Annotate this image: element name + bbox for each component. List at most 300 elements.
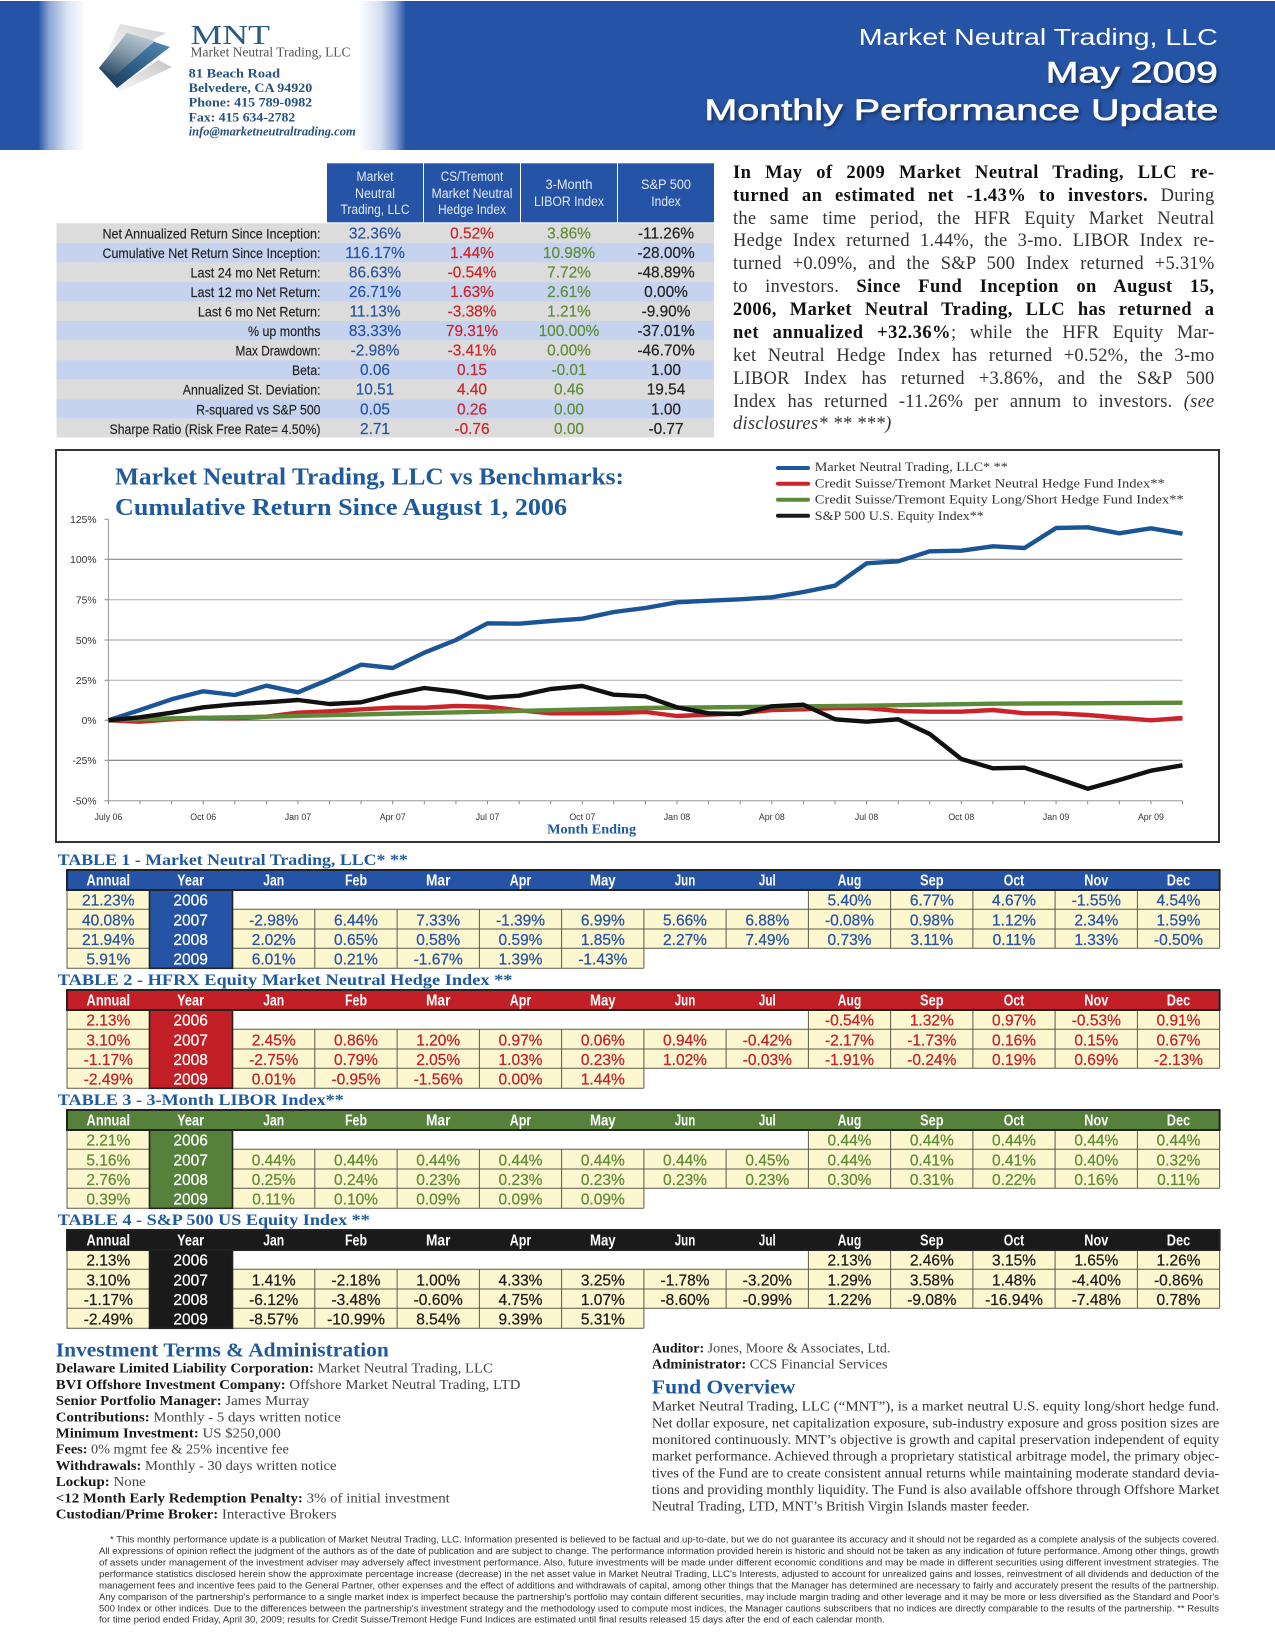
table 2: HFRX index monthly returns: 0.23% (581, 1052, 625, 1069)
table 4: S&P 500 monthly returns: 2006 (173, 1253, 208, 1270)
table 4: S&P 500 monthly returns: -0.86% (1154, 1273, 1203, 1290)
values: LIBOR index: 10.98% (543, 245, 595, 262)
company name and address: info@marketneutraltrading.com (189, 124, 356, 139)
values: Market Neutral Trading: -2.98% (351, 343, 400, 360)
table 1: Market Neutral Trading monthly returns: 2008 (173, 932, 208, 949)
table 2: HFRX index monthly returns: -1.56% (414, 1071, 463, 1088)
values: S&P 500 index: -0.77 (648, 421, 684, 438)
x axis labels: Jan 08 (664, 812, 690, 822)
table 4: S&P 500 monthly returns: Annual (87, 1233, 130, 1250)
row labels: Last 6 mo Net Return: (198, 304, 320, 320)
table 3: LIBOR index monthly returns: 0.25% (252, 1172, 296, 1189)
table 3: LIBOR index monthly returns: 0.44% (499, 1153, 543, 1170)
x axis labels: July 06 (94, 812, 122, 822)
commentary paragraph: LIBOR Index has returned +3.86%, and the S&P 500 (733, 369, 1214, 389)
table 3: LIBOR index monthly returns: 0.11% (252, 1191, 295, 1208)
table 3: LIBOR index monthly returns: Year (177, 1113, 204, 1130)
table 1: Market Neutral Trading monthly returns: Jan (263, 873, 284, 890)
table 1: Market Neutral Trading monthly returns: 21.94% (82, 932, 135, 949)
table 2: HFRX index monthly returns: -1.91% (825, 1052, 874, 1069)
table 4: S&P 500 monthly returns: 1.26% (1157, 1253, 1201, 1270)
table 1: Market Neutral Trading monthly returns: 5.40% (828, 893, 872, 910)
heading: fund overview: Fund Overview (652, 1376, 796, 1398)
table 3: LIBOR index monthly returns: 0.09% (416, 1191, 460, 1208)
values: S&P 500 index: 19.54 (647, 382, 686, 399)
overview paragraph: Net dollar exposure, net capitalization exposure, sub-industry exposure and gross position sizes are (652, 1415, 1219, 1430)
panel: investment terms and administration (56, 1340, 521, 1522)
table 4: S&P 500 monthly returns: TABLE 4 - S&P 500 US Equity Index ** (58, 1212, 370, 1229)
table 4: S&P 500 monthly returns: 9.39% (499, 1311, 543, 1328)
row labels: Net Annualized Return Since Inception: (102, 225, 320, 241)
panel: summary statistics table (56, 163, 714, 438)
chart title: Cumulative Return Since August 1, 2006 (115, 495, 567, 521)
table 3: LIBOR index monthly returns: 2.21% (86, 1133, 130, 1150)
y axis labels: 25% (76, 676, 96, 687)
row labels: Max Drawdown: (236, 343, 320, 359)
table 3: LIBOR index monthly returns: 0.44% (334, 1153, 378, 1170)
table 2: HFRX index monthly returns (58, 972, 1220, 1088)
commentary paragraph: Index has returned -11.26% per annum to investors. (see (733, 392, 1214, 412)
table 4: S&P 500 monthly returns: Apr (510, 1233, 531, 1250)
company name and address: Fax: 415 634-2782 (189, 109, 295, 124)
values: CS/Tremont index: 0.26 (457, 401, 487, 418)
table 4: S&P 500 monthly returns: -9.08% (907, 1292, 957, 1309)
x axis labels: Oct 08 (948, 812, 974, 822)
table 4: S&P 500 monthly returns: 2.13% (828, 1253, 872, 1270)
commentary paragraph: disclosures* ** ***) (733, 414, 891, 434)
values: CS/Tremont index: -0.54% (448, 264, 497, 281)
values: LIBOR index: 3.86% (547, 225, 591, 242)
legend (778, 459, 1184, 523)
company name and address: 81 Beach Road (189, 65, 281, 80)
gridlines and axes (104, 519, 1182, 804)
y axis labels: 0% (82, 716, 96, 727)
table 1: Market Neutral Trading monthly returns: Dec (1167, 873, 1191, 890)
table 4: S&P 500 monthly returns: 2007 (173, 1273, 208, 1290)
terms list: Senior Portfolio Manager: James Murray (56, 1393, 310, 1408)
overview paragraph: monitored continuously. MNT’s objective is growth and capital preservation independent of equity (652, 1432, 1219, 1447)
table 1: Market Neutral Trading monthly returns: 4.54% (1157, 893, 1201, 910)
table 3: LIBOR index monthly returns: 0.23% (663, 1172, 707, 1189)
table 2: HFRX index monthly returns: Feb (345, 993, 367, 1010)
table 3: LIBOR index monthly returns: 0.22% (992, 1172, 1036, 1189)
row labels: Last 12 mo Net Return: (190, 284, 320, 300)
values: LIBOR index: 2.61% (547, 284, 591, 301)
table 1: Market Neutral Trading monthly returns: 21.23% (82, 893, 135, 910)
values: CS/Tremont index: 4.40 (457, 382, 487, 399)
table 4: S&P 500 monthly returns: 2.13% (86, 1253, 130, 1270)
table 1: Market Neutral Trading monthly returns (58, 852, 1220, 968)
table 1: Market Neutral Trading monthly returns: 0.11% (993, 932, 1036, 949)
table 2: HFRX index monthly returns: 1.44% (581, 1071, 625, 1088)
table 2: HFRX index monthly returns: -2.17% (825, 1033, 874, 1050)
table 4: S&P 500 monthly returns: 1.41% (252, 1273, 296, 1290)
values: CS/Tremont index (446, 225, 498, 438)
table 3: LIBOR index monthly returns: 5.16% (86, 1153, 130, 1170)
column headers: Neutral (355, 186, 395, 201)
table 4: S&P 500 monthly returns: 1.48% (992, 1273, 1036, 1290)
table 4: S&P 500 monthly returns: 3.10% (86, 1273, 130, 1290)
table 3: LIBOR index monthly returns: 0.44% (252, 1153, 296, 1170)
panel: fund overview (652, 1376, 1220, 1514)
table 2: HFRX index monthly returns: Nov (1084, 993, 1109, 1010)
table 1: Market Neutral Trading monthly returns: 6.77% (910, 893, 954, 910)
row labels: Beta: (292, 362, 320, 378)
values: LIBOR index: 0.00 (554, 401, 584, 418)
table 4: S&P 500 monthly returns: Sep (920, 1233, 944, 1250)
table 3: LIBOR index monthly returns: 0.44% (992, 1133, 1036, 1150)
table 2: HFRX index monthly returns: -1.73% (907, 1033, 957, 1050)
table 4: S&P 500 monthly returns: Aug (838, 1233, 861, 1250)
legend: Credit Suisse/Tremont Equity Long/Short Hedge Fund Index** (815, 492, 1184, 507)
table 1: Market Neutral Trading monthly returns: 0.73% (828, 932, 872, 949)
overview paragraph: Market Neutral Trading, LLC (“MNT”), is a market neutral U.S. equity long/short hedge fund. (652, 1399, 1219, 1415)
table 2: HFRX index monthly returns: Year (177, 993, 204, 1010)
values: LIBOR index: 7.72% (547, 264, 591, 281)
table 2: HFRX index monthly returns: 0.00% (499, 1071, 543, 1088)
table 3: LIBOR index monthly returns: 0.24% (334, 1172, 378, 1189)
values: S&P 500 index: -28.00% (637, 245, 695, 262)
table 2: HFRX index monthly returns: -0.54% (825, 1013, 874, 1030)
disclosures footnote: for time period ended Friday, April 30, 2009; results for Credit Suisse/Tremont Hedge Fund Indices are estimated until final results released 15 days after the end of each calendar month. (99, 1615, 885, 1626)
values: LIBOR index: 1.21% (547, 304, 591, 320)
values: LIBOR index: 0.00 (554, 421, 584, 438)
y axis labels: -50% (72, 796, 96, 808)
table 4: S&P 500 monthly returns: 3.58% (910, 1273, 954, 1290)
table 3: LIBOR index monthly returns: Apr (510, 1113, 531, 1130)
table 1: Market Neutral Trading monthly returns: 1.33% (1074, 932, 1118, 949)
values: S&P 500 index: -9.90% (642, 304, 691, 320)
column headers: LIBOR Index (534, 194, 604, 209)
table 3: LIBOR index monthly returns: 0.32% (1157, 1153, 1201, 1170)
table 1: Market Neutral Trading monthly returns: 1.12% (992, 913, 1036, 930)
values: S&P 500 index: 1.00 (651, 362, 681, 379)
table 3: LIBOR index monthly returns: 0.41% (992, 1153, 1036, 1170)
table 4: S&P 500 monthly returns: -1.17% (84, 1292, 133, 1309)
table 4: S&P 500 monthly returns: 2008 (173, 1292, 208, 1309)
table 1: Market Neutral Trading monthly returns: 1.85% (581, 932, 625, 949)
table 2: HFRX index monthly returns: 0.79% (334, 1052, 378, 1069)
values: S&P 500 index: 1.00 (651, 401, 681, 418)
table 4: S&P 500 monthly returns: Year (177, 1233, 204, 1250)
table 4: S&P 500 monthly returns: -3.48% (331, 1292, 381, 1309)
table 4: S&P 500 monthly returns: -10.99% (327, 1311, 385, 1328)
x axis labels: Oct 07 (569, 812, 595, 822)
values: Market Neutral Trading: 116.17% (345, 245, 405, 262)
table 1: Market Neutral Trading monthly returns: -1.67% (414, 951, 463, 968)
commentary paragraph: 2006, Market Neutral Trading, LLC has returned a (733, 300, 1214, 320)
table 1: Market Neutral Trading monthly returns: -0.50% (1154, 932, 1203, 949)
table 2: HFRX index monthly returns: TABLE 2 - HFRX Equity Market Neutral Hedge Index ** (58, 972, 513, 989)
table 1: Market Neutral Trading monthly returns: 2009 (173, 951, 208, 968)
y axis labels: 125% (70, 515, 96, 526)
banner subtitle: Market Neutral Trading, LLC (859, 24, 1218, 50)
legend: S&P 500 U.S. Equity Index** (815, 508, 984, 523)
table 2: HFRX index monthly returns: 0.01% (252, 1071, 296, 1088)
values: Market Neutral Trading: 86.63% (349, 264, 401, 281)
heading: investment terms: Investment Terms & Administration (56, 1340, 389, 1362)
table 1: Market Neutral Trading monthly returns: Jul (759, 873, 776, 890)
table 4: S&P 500 monthly returns: -2.49% (84, 1311, 133, 1328)
table 2: HFRX index monthly returns: 2.45% (252, 1033, 296, 1050)
table 1: Market Neutral Trading monthly returns: Jun (675, 873, 695, 890)
table 2: HFRX index monthly returns: May (590, 993, 616, 1010)
table 1: Market Neutral Trading monthly returns: 7.33% (416, 913, 460, 930)
terms list: Minimum Investment: US $250,000 (56, 1426, 281, 1440)
table 3: LIBOR index monthly returns: 0.44% (828, 1153, 872, 1170)
disclosures footnote: management fees and incentive fees paid to the General Partner, other expenses and the effect of additions and withdrawals of capital, among other things that the Manager has determined are necessary to fairly and accurately present the results of the partnership. (99, 1580, 1219, 1591)
table 4: S&P 500 monthly returns: -1.78% (660, 1273, 710, 1290)
commentary paragraph: turned +0.09%, and the S&P 500 Index returned +5.31% (733, 254, 1214, 274)
values: CS/Tremont index: -3.41% (448, 343, 497, 360)
table 3: LIBOR index monthly returns: 0.44% (1074, 1133, 1118, 1150)
icon: MNT logo mark (99, 24, 172, 92)
table 1: Market Neutral Trading monthly returns: 0.65% (334, 932, 378, 949)
commentary paragraph: the same time period, the HFR Equity Market Neutral (733, 209, 1214, 229)
table 1: Market Neutral Trading monthly returns: -1.43% (578, 951, 628, 968)
table 1: Market Neutral Trading monthly returns: 6.01% (252, 951, 296, 968)
table 1: Market Neutral Trading monthly returns: Sep (920, 873, 944, 890)
table 1: Market Neutral Trading monthly returns: 6.88% (745, 913, 789, 930)
banner titles (704, 56, 1218, 127)
table 2: HFRX index monthly returns: Oct (1004, 993, 1024, 1010)
table 3: LIBOR index monthly returns: Jul (759, 1113, 776, 1130)
table 1: Market Neutral Trading monthly returns: 2.02% (252, 932, 296, 949)
table 1: Market Neutral Trading monthly returns: TABLE 1 - Market Neutral Trading, LLC* ** (58, 852, 408, 869)
table 4: S&P 500 monthly returns: -8.60% (660, 1292, 710, 1309)
line: CS/Tremont Long/Short index (108, 703, 1182, 720)
table 4: S&P 500 monthly returns: 4.33% (499, 1273, 543, 1290)
values: S&P 500 index: -11.26% (638, 225, 694, 242)
table 1: Market Neutral Trading monthly returns: Mar (426, 873, 450, 890)
table 1: Market Neutral Trading monthly returns: 5.66% (663, 913, 707, 930)
terms list: Withdrawals: Monthly - 30 days written notice (56, 1458, 337, 1473)
commentary paragraph: turned an estimated net -1.43% to investors. During (733, 186, 1214, 206)
row labels: R-squared vs S&P 500 (196, 401, 321, 417)
column headers: S&P 500 (641, 177, 691, 192)
chart title: Market Neutral Trading, LLC vs Benchmarks: (115, 464, 624, 490)
terms list (56, 1361, 521, 1522)
table 1: Market Neutral Trading monthly returns: Apr (510, 873, 531, 890)
table 1: Market Neutral Trading monthly returns: -1.55% (1072, 893, 1121, 910)
table 4: S&P 500 monthly returns: 1.07% (581, 1292, 625, 1309)
table 1: Market Neutral Trading monthly returns: 3.11% (910, 932, 953, 949)
table 2: HFRX index monthly returns: 0.15% (1074, 1033, 1118, 1050)
table 2: HFRX index monthly returns: -0.42% (743, 1033, 792, 1050)
table 4: S&P 500 monthly returns: 5.31% (581, 1311, 625, 1328)
disclosures footnote: performance statistics disclosed herein show the approximate percentage increase (decrease) in the net asset value in Market Neutral Trading, LLC's Interests, adjusted to account for unrealized gains and losses, reinvestment of all dividends and deduction of the (99, 1569, 1219, 1580)
table 1: Market Neutral Trading monthly returns: 2.27% (663, 932, 707, 949)
table 3: LIBOR index monthly returns: Annual (87, 1113, 130, 1130)
values: S&P 500 index: 0.00% (644, 284, 688, 301)
table 4: S&P 500 monthly returns: Oct (1004, 1233, 1024, 1250)
table 3: LIBOR index monthly returns: 0.16% (1074, 1172, 1118, 1189)
table 4: S&P 500 monthly returns: 1.22% (828, 1292, 872, 1309)
legend: Market Neutral Trading, LLC* ** (815, 459, 1008, 474)
table 3: LIBOR index monthly returns: Sep (920, 1113, 944, 1130)
values: Market Neutral Trading: 10.51 (356, 382, 394, 399)
table 3: LIBOR index monthly returns: 0.44% (910, 1133, 954, 1150)
table 2: HFRX index monthly returns: Jan (263, 993, 284, 1010)
values: S&P 500 index: -46.70% (637, 343, 695, 360)
table 3: LIBOR index monthly returns: 0.10% (334, 1191, 378, 1208)
x axis labels: Apr 09 (1138, 812, 1164, 822)
table 1: Market Neutral Trading monthly returns: Year (177, 873, 204, 890)
values: LIBOR index: 0.46 (554, 382, 584, 399)
values: LIBOR index: 100.00% (539, 323, 600, 340)
row labels: Annualized St. Deviation: (183, 382, 320, 398)
column headers: Market Neutral (432, 186, 512, 201)
table 4: S&P 500 monthly returns: Mar (426, 1233, 450, 1250)
table 2: HFRX index monthly returns: 0.19% (992, 1052, 1036, 1069)
table 3: LIBOR index monthly returns: Nov (1084, 1113, 1109, 1130)
table 3: LIBOR index monthly returns: 0.40% (1074, 1153, 1118, 1170)
table 4: S&P 500 monthly returns: 0.78% (1157, 1292, 1201, 1309)
table 4: S&P 500 monthly returns: Jan (263, 1233, 284, 1250)
table 4: S&P 500 monthly returns: Jun (675, 1233, 695, 1250)
table 2: HFRX index monthly returns: 0.97% (499, 1033, 543, 1050)
values: CS/Tremont index: -3.38% (448, 304, 497, 320)
table 1: Market Neutral Trading monthly returns: 0.21% (334, 951, 378, 968)
table 1: Market Neutral Trading monthly returns: 5.91% (86, 951, 130, 968)
commentary paragraph: net annualized +32.36%; while the HFR Equity Mar- (733, 323, 1214, 343)
table 1: Market Neutral Trading monthly returns: Feb (345, 873, 367, 890)
table 3: LIBOR index monthly returns: 0.11% (1157, 1172, 1200, 1189)
table 3: LIBOR index monthly returns (58, 1092, 1220, 1208)
values: LIBOR index (539, 225, 600, 438)
table 3: LIBOR index monthly returns: 0.23% (416, 1172, 460, 1189)
table 3: LIBOR index monthly returns: 2009 (173, 1191, 208, 1208)
table 4: S&P 500 monthly returns: 8.54% (416, 1311, 460, 1328)
values: Market Neutral Trading: 2.71 (360, 421, 390, 438)
commentary paragraph: to investors. Since Fund Inception on August 15, (733, 277, 1214, 297)
y axis labels: -25% (72, 756, 96, 767)
terms list: Lockup: None (56, 1474, 146, 1489)
values: Market Neutral Trading: 83.33% (349, 323, 401, 340)
table 1: Market Neutral Trading monthly returns: 0.59% (499, 932, 543, 949)
values: S&P 500 index: -48.89% (637, 264, 695, 281)
x axis labels: Jan 07 (285, 812, 311, 822)
disclosures footnote: All expressions of opinion reflect the judgment of the authors as of the date of publication and are subject to change. The performance information provided herein is historic and should not be taken as any indication of future performance. Among other things, growth (99, 1546, 1219, 1557)
table 4: S&P 500 monthly returns: 3.25% (581, 1273, 625, 1290)
table 2: HFRX index monthly returns: 1.32% (910, 1013, 954, 1030)
table 2: HFRX index monthly returns: Mar (426, 993, 450, 1010)
x axis labels (94, 812, 1164, 822)
table 4: S&P 500 monthly returns: 3.15% (992, 1253, 1036, 1270)
table 1: Market Neutral Trading monthly returns: Oct (1004, 873, 1024, 890)
x axis title: Month Ending (547, 822, 636, 837)
overview paragraph: tions and providing monthly liquidity. The Fund is also available offshore through Offshore Market (652, 1482, 1219, 1497)
table 4: S&P 500 monthly returns: -2.18% (331, 1273, 381, 1290)
table 3: LIBOR index monthly returns: 0.44% (663, 1153, 707, 1170)
table 2: HFRX index monthly returns: 0.97% (992, 1013, 1036, 1030)
x axis labels: Jul 08 (855, 812, 878, 822)
row labels (102, 225, 321, 437)
row labels: Sharpe Ratio (Risk Free Rate= 4.50%) (110, 421, 320, 437)
table 1: Market Neutral Trading monthly returns: 2006 (173, 893, 208, 910)
table 1: Market Neutral Trading monthly returns: Annual (87, 873, 130, 890)
table 3: LIBOR index monthly returns: 0.23% (499, 1172, 543, 1189)
table 3: LIBOR index monthly returns: 0.23% (581, 1172, 625, 1189)
table 3: LIBOR index monthly returns: 0.45% (745, 1153, 789, 1170)
values: Market Neutral Trading: 26.71% (349, 284, 401, 301)
table 4: S&P 500 monthly returns: Feb (345, 1233, 367, 1250)
values: Market Neutral Trading: 32.36% (349, 225, 401, 242)
company name and address: Belvedere, CA 94920 (189, 80, 312, 95)
table 3: LIBOR index monthly returns: 0.30% (828, 1172, 872, 1189)
company name and address (189, 20, 356, 139)
table 1: Market Neutral Trading monthly returns: 1.39% (499, 951, 543, 968)
table 3: LIBOR index monthly returns: 0.44% (416, 1153, 460, 1170)
company name and address: Market Neutral Trading, LLC (190, 45, 350, 60)
table 2: HFRX index monthly returns: 2006 (173, 1013, 208, 1030)
table 3: LIBOR index monthly returns: 0.44% (581, 1153, 625, 1170)
legend: Credit Suisse/Tremont Market Neutral Hedge Fund Index** (815, 475, 1165, 490)
terms list: Fees: 0% mgmt fee & 25% incentive fee (56, 1442, 289, 1457)
table 4: S&P 500 monthly returns: -16.94% (985, 1292, 1043, 1309)
values: CS/Tremont index: 1.44% (450, 245, 494, 262)
table 3: LIBOR index monthly returns: 0.23% (745, 1172, 789, 1189)
table 1: Market Neutral Trading monthly returns: 6.99% (581, 913, 625, 930)
commentary paragraph: Hedge Index returned 1.44%, the 3-mo. LIBOR Index re- (733, 231, 1214, 251)
overview paragraph: tives of the Fund are to create consistent annual returns while maintaining moderate standard devia- (652, 1465, 1220, 1480)
table 3: LIBOR index monthly returns: Jan (263, 1113, 284, 1130)
values: CS/Tremont index: -0.76 (454, 421, 490, 438)
table 2: HFRX index monthly returns: Apr (510, 993, 531, 1010)
values: CS/Tremont index: 0.52% (450, 225, 494, 242)
commentary paragraph (733, 163, 1214, 434)
x axis labels: Oct 06 (190, 812, 216, 822)
table 3: LIBOR index monthly returns: Oct (1004, 1113, 1024, 1130)
values: Market Neutral Trading (345, 225, 405, 438)
table 2: HFRX index monthly returns: -0.03% (743, 1052, 792, 1069)
header banner (0, 1, 1275, 150)
table 1: Market Neutral Trading monthly returns: -2.98% (249, 913, 298, 930)
terms list: BVI Offshore Investment Company: Offshore Market Neutral Trading, LTD (56, 1377, 521, 1392)
banner titles: Monthly Performance Update (704, 94, 1218, 127)
table 3: LIBOR index monthly returns: 2007 (173, 1153, 208, 1170)
table 1: Market Neutral Trading monthly returns: 2.34% (1074, 913, 1118, 930)
table 1: Market Neutral Trading monthly returns: 1.59% (1157, 913, 1201, 930)
table 2: HFRX index monthly returns: Dec (1167, 993, 1191, 1010)
terms list: Custodian/Prime Broker: Interactive Brokers (56, 1506, 337, 1522)
values: S&P 500 index: -37.01% (637, 323, 695, 340)
disclosures footnote: of assets under management of the investment adviser may adversely affect investment performance. Also, future investments will be made under different economic conditions and may be made in different securities using different investment strategies. The (99, 1558, 1219, 1569)
table 3: LIBOR index monthly returns: 0.39% (86, 1191, 130, 1208)
table 4: S&P 500 monthly returns: -0.60% (414, 1292, 463, 1309)
table 2: HFRX index monthly returns: -0.24% (907, 1052, 957, 1069)
table 2: HFRX index monthly returns: Aug (838, 993, 861, 1010)
table 3: LIBOR index monthly returns: Feb (345, 1113, 367, 1130)
table 3: LIBOR index monthly returns: 2008 (173, 1172, 208, 1189)
panel: cumulative return line chart (56, 450, 1219, 842)
table 1: Market Neutral Trading monthly returns: -1.39% (496, 913, 545, 930)
table 2: HFRX index monthly returns: Jun (675, 993, 695, 1010)
table 4: S&P 500 monthly returns: Dec (1167, 1233, 1191, 1250)
table 1: Market Neutral Trading monthly returns: 6.44% (334, 913, 378, 930)
values: S&P 500 index (637, 225, 695, 438)
column headers: 3-Month (546, 177, 592, 192)
commentary paragraph: In May of 2009 Market Neutral Trading, LLC re- (733, 163, 1214, 183)
terms list: Contributions: Monthly - 5 days written notice (56, 1409, 341, 1424)
values: LIBOR index: -0.01 (551, 362, 587, 379)
terms list: Delaware Limited Liability Corporation: Market Neutral Trading, LLC (56, 1361, 493, 1376)
y axis labels: 75% (76, 596, 96, 606)
x axis labels: Jul 07 (476, 812, 499, 822)
disclosures footnote: 500 Index or other indices. Due to the differences between the partnership's investment strategy and the methodology used to compute most indices, the Manager cautions subscribers that no indices are directly comparable to the results of the partnership. ** Results (99, 1603, 1219, 1614)
table 3: LIBOR index monthly returns: 2.76% (86, 1172, 130, 1189)
table 4: S&P 500 monthly returns: 2009 (173, 1311, 208, 1328)
